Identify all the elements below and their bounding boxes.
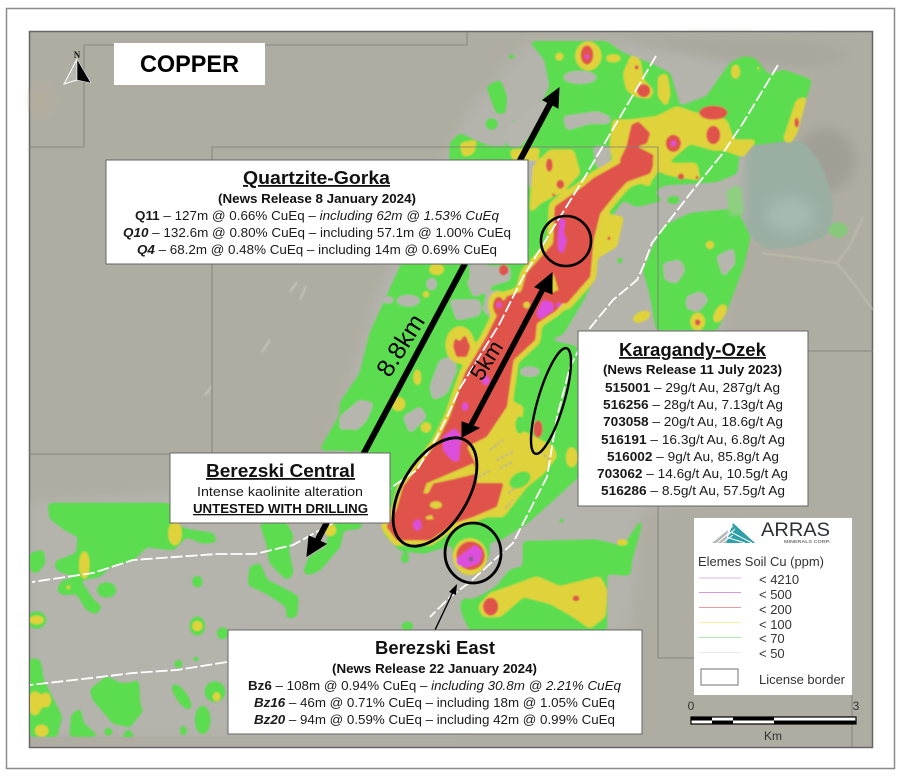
panel: Berezski East [228, 630, 642, 734]
legend class: under 4210 [699, 572, 799, 587]
legend [694, 518, 852, 695]
news release date: (News Release 11 July 2023) [603, 362, 782, 377]
heading: Quartzite-Gorka [243, 168, 391, 188]
sample results: 516256 – 28g/t Au, 7.13g/t Ag [603, 397, 783, 412]
gaps inside the anomaly [340, 71, 735, 433]
legend class: under 200: < 200 [759, 602, 792, 617]
ellipse: Berezski Central target [376, 424, 494, 560]
panel: Karagandy-Ozek [578, 331, 808, 506]
red contour zone [387, 46, 799, 615]
legend title: Elemes Soil Cu (ppm) [698, 554, 824, 569]
legend class: under 70: < 70 [759, 631, 785, 646]
scale bar: Km [764, 729, 782, 743]
drill results [123, 208, 511, 257]
scale bar: 3 [853, 699, 860, 713]
icon: Arras logo: MINERALS CORP. [784, 539, 830, 544]
legend class: under 4210: < 4210 [759, 572, 799, 587]
yellow contour zone [29, 42, 807, 736]
green contour zone: central belt [340, 260, 582, 553]
panel: Berezski Central [170, 453, 390, 523]
heading: Berezski Central [206, 461, 355, 481]
sample results: 515001 – 29g/t Au, 287g/t Ag [605, 380, 780, 395]
magenta high-grade cores [413, 55, 676, 567]
ellipse: Karagandy-Ozek target [523, 345, 579, 457]
drilling status: UNTESTED WITH DRILLING [193, 501, 368, 516]
legend class: under 50 [699, 646, 785, 661]
label: 8.8km: 8.8km [371, 309, 431, 382]
icon: north arrow [64, 50, 91, 84]
heading: Berezski East [375, 638, 495, 658]
green contour zone: south-west [27, 390, 413, 738]
green contour zone: north-east [448, 40, 848, 342]
ellipse: Berezski East target [445, 523, 501, 583]
sample results: 703062 – 14.6g/t Au, 10.5g/t Ag [597, 466, 788, 481]
alteration note: Intense kaolinite alteration [197, 484, 363, 499]
scale bar [688, 699, 860, 743]
legend class: under 100 [699, 617, 792, 632]
icon: Arras logo: ARRAS [761, 520, 830, 541]
green contour zone: south-east lobes [453, 517, 643, 630]
heading: Karagandy-Ozek [619, 340, 767, 360]
drill results [248, 678, 622, 727]
speckled low-grade texture [478, 440, 550, 508]
legend class: under 50: < 50 [759, 646, 785, 661]
legend class: under 500 [699, 587, 792, 602]
drill results: Q11 – 127m @ 0.66% CuEq – including 62m @ 1.53% CuEq [135, 208, 500, 223]
lake [739, 128, 873, 310]
news release date: (News Release 8 January 2024) [218, 191, 416, 206]
drill results: Q10 – 132.6m @ 0.80% CuEq – including 57.1m @ 1.00% CuEq [123, 225, 511, 240]
panel: Quartzite-Gorka [106, 160, 528, 264]
legend class: licence border [701, 669, 846, 687]
scale bar: 0 [688, 699, 695, 713]
drill results: Bz16 – 46m @ 0.71% CuEq – including 18m @ 1.05% CuEq [254, 695, 615, 710]
circle: Quartzite-Gorka target [541, 216, 591, 266]
legend class: under 500: < 500 [759, 587, 792, 602]
arrow: 5 km extent [462, 273, 552, 437]
sample results: 703058 – 20g/t Au, 18.6g/t Ag [603, 414, 783, 429]
sample results: 516286 – 8.5g/t Au, 57.5g/t Ag [601, 483, 785, 498]
label: 5km: 5km [465, 336, 508, 385]
drill results: Bz20 – 94m @ 0.59% CuEq – including 42m @ 0.99% CuEq [254, 712, 615, 727]
yellow bands within the red zone [423, 273, 558, 540]
dashed structural lines [30, 56, 778, 685]
green patches inside yellow [508, 416, 532, 490]
title: COPPER: COPPER [140, 51, 239, 78]
icon: Arras logo [712, 520, 830, 544]
legend class: under 70 [699, 631, 785, 646]
legend class: under 100: < 100 [759, 617, 792, 632]
arrow: Berezski East pointer [435, 584, 457, 630]
sample results: 516002 – 9g/t Au, 85.8g/t Ag [607, 449, 779, 464]
sample results [597, 380, 788, 498]
arrow: 8.8 km extent [307, 88, 559, 556]
legend class: under 200 [699, 602, 792, 617]
title: COPPER [114, 43, 265, 85]
drill results: Bz6 – 108m @ 0.94% CuEq – including 30.8m @ 2.21% CuEq [248, 678, 622, 693]
survey footprint [30, 42, 812, 737]
news release date: (News Release 22 January 2024) [332, 661, 537, 676]
icon: north arrow: N [74, 50, 81, 60]
sample results: 516191 – 16.3g/t Au, 6.8g/t Ag [601, 432, 785, 447]
legend class: licence border: License border [759, 672, 846, 687]
drill results: Q4 – 68.2m @ 0.48% CuEq – including 14m @ 0.69% CuEq [137, 242, 497, 257]
